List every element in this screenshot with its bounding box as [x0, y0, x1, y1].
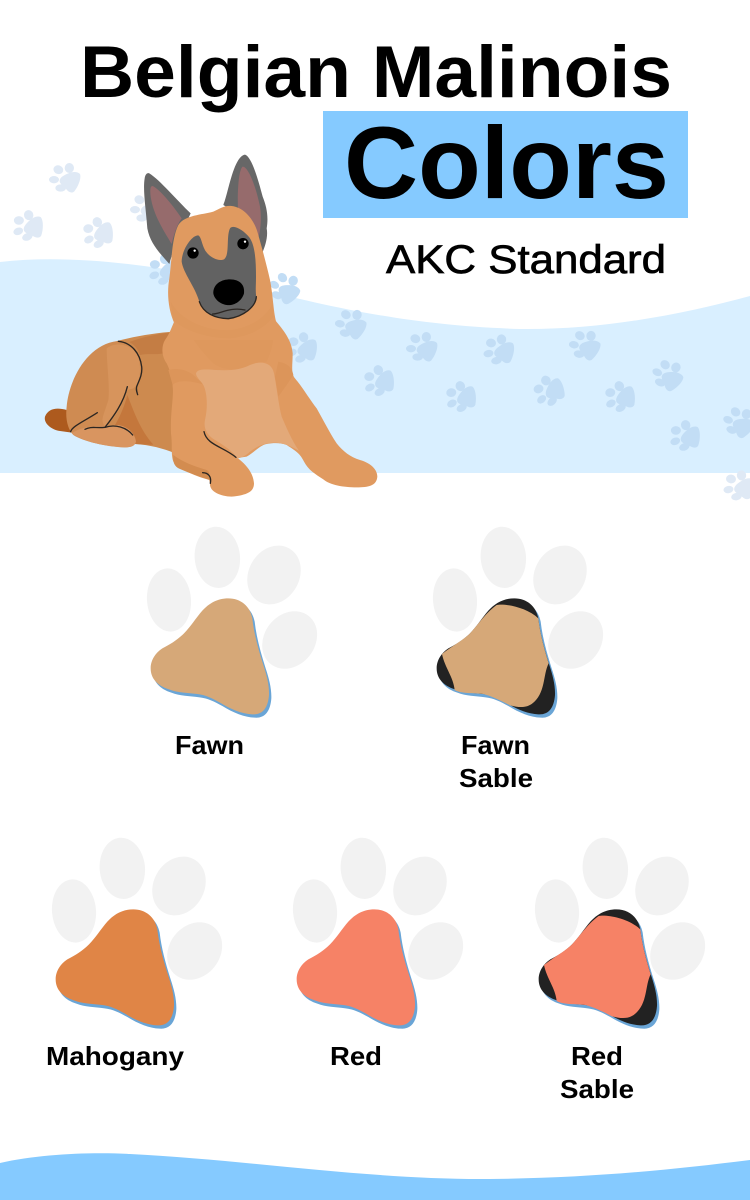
dog front body, legs and chest: [162, 320, 377, 497]
color swatch: Mahogany: [46, 836, 234, 1071]
left and right ears: [144, 155, 267, 264]
color swatch: Red Sable: [532, 836, 717, 1104]
color swatch: Fawn Sable: [430, 525, 615, 793]
highlighted heading: Colors: Colors: [344, 106, 669, 220]
color swatch: Fawn: Fawn: [175, 730, 244, 760]
color swatch: Red Sable: Sable: [560, 1074, 634, 1104]
color swatch: Mahogany: Mahogany: [46, 1041, 185, 1071]
background: paw print pattern: [8, 163, 750, 503]
color swatch: Fawn Sable: Fawn: [461, 730, 530, 760]
dog head and face: [167, 206, 287, 340]
color swatch: Fawn Sable: Sable: [459, 763, 533, 793]
subtitle: AKC Standard: [386, 238, 666, 282]
background: light blue wave band: [0, 259, 750, 473]
footer wave: [0, 1153, 750, 1200]
color swatch: Red: [290, 836, 475, 1071]
color swatch: Red: Red: [330, 1041, 382, 1071]
illustration: Belgian Malinois dog lying down: [45, 155, 377, 497]
color swatch: Red Sable: Red: [571, 1041, 623, 1071]
color swatch: Fawn: [144, 525, 329, 760]
title: Belgian Malinois: [80, 32, 672, 113]
dog rear body: [45, 332, 175, 453]
